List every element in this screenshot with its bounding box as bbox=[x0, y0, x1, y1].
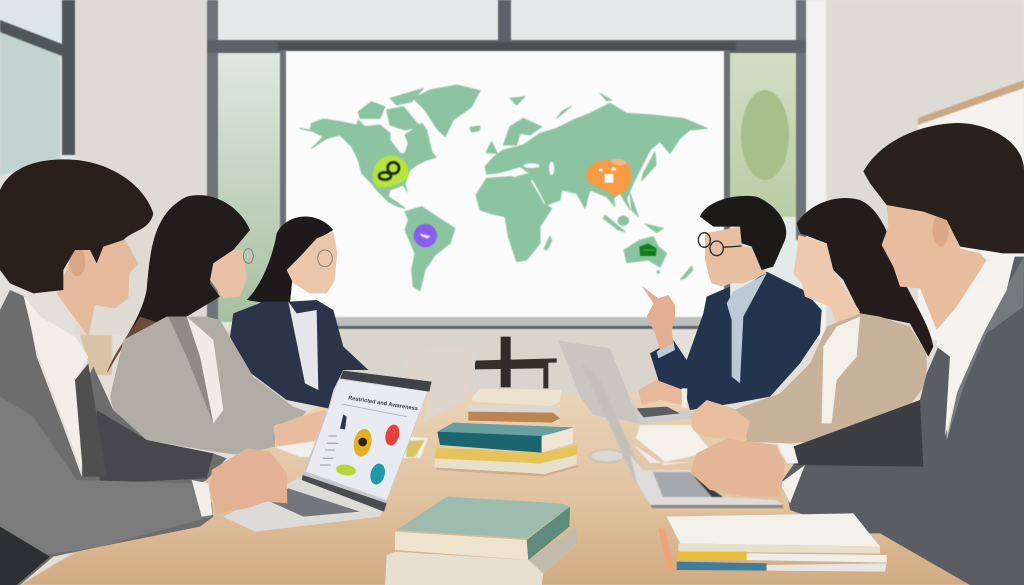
small side table bbox=[80, 335, 112, 375]
stand and bench behind table bbox=[475, 337, 557, 388]
person: woman in beige jacket, left bbox=[107, 195, 327, 455]
front right laptop bbox=[582, 365, 783, 508]
laptop screen bbox=[306, 379, 427, 500]
person: man in navy suit gesturing, right bbox=[638, 196, 822, 410]
person: woman in navy jacket, back left bbox=[230, 217, 368, 408]
large window with trees bbox=[207, 0, 806, 330]
whiteboard on right wall bbox=[918, 80, 1024, 340]
hands bbox=[690, 438, 785, 497]
region marker: South America bbox=[414, 224, 437, 247]
person: woman in tan jacket, right bbox=[690, 198, 933, 443]
person: man in dark grey suit, front right bbox=[690, 123, 1024, 585]
papers on table bbox=[275, 425, 712, 465]
back laptop, centre left bbox=[400, 345, 480, 423]
hand pointing bbox=[642, 286, 675, 350]
left window bbox=[0, 0, 75, 175]
region marker: China bbox=[586, 159, 631, 195]
projection screen with world map bbox=[278, 42, 736, 329]
laptop screen: Restricted and Awareness bbox=[348, 395, 418, 412]
hands bbox=[210, 448, 287, 513]
person: man in grey suit, front left bbox=[0, 159, 287, 585]
region marker: Australia bbox=[639, 243, 657, 256]
book stack, centre back bbox=[468, 388, 562, 423]
back laptop, centre right bbox=[558, 341, 692, 424]
region marker: North America bbox=[373, 155, 409, 188]
world map bbox=[300, 85, 707, 291]
table bbox=[20, 393, 972, 585]
book and notebook stack, front right bbox=[658, 513, 887, 572]
book stack, front centre bbox=[385, 497, 578, 585]
front laptop with diagram on screen bbox=[223, 370, 432, 532]
book stack, centre front bbox=[434, 423, 580, 477]
